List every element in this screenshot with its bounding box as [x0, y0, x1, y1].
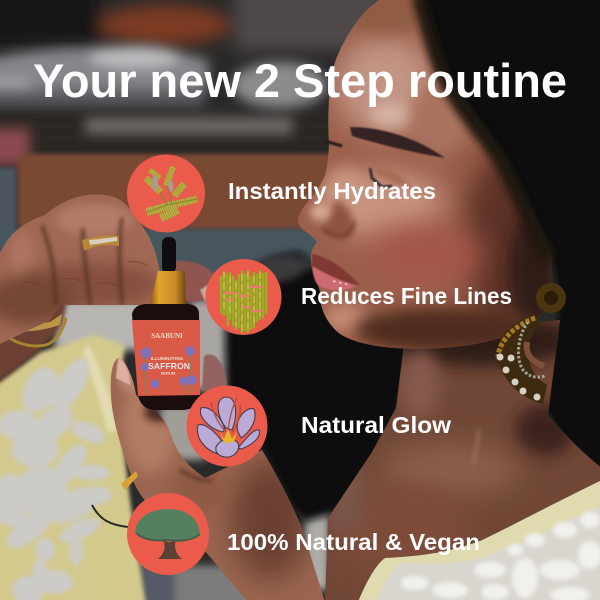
- dark hair behind hand: [225, 252, 415, 522]
- benefit: Reduces Fine Lines: Reduces Fine Lines: [301, 283, 512, 309]
- product bottle: [132, 237, 200, 410]
- product bottle: ILLUMINATING: [151, 356, 184, 361]
- product bottle: SAFFRON: [148, 361, 190, 371]
- badge: saffron flower: [186, 386, 268, 466]
- hair: right side: [412, 0, 600, 480]
- badge: green tree: [127, 493, 209, 575]
- product bottle: SAABUNI: [151, 332, 183, 340]
- badge: wheatgrass bundles: [206, 259, 282, 335]
- white kurta neckline: [358, 480, 600, 600]
- hand holding bottle: [105, 350, 330, 600]
- badge: herb sprig: [127, 154, 205, 232]
- yellow garment with white embroidery: [0, 335, 146, 600]
- hand holding dropper: [0, 190, 213, 350]
- product bottle: SERUM: [161, 370, 176, 376]
- earring: [496, 283, 566, 404]
- neck and chest: [320, 314, 600, 600]
- title: Your new 2 Step routine: [33, 54, 567, 107]
- left forearm with bracelets: [0, 270, 70, 384]
- face: [298, 0, 554, 349]
- benefit: Instantly Hydrates: Instantly Hydrates: [228, 178, 436, 204]
- ring on lower hand: [121, 471, 138, 490]
- benefit: 100% Natural & Vegan: 100% Natural & Vegan: [227, 529, 480, 555]
- benefit: Natural Glow: Natural Glow: [301, 412, 451, 438]
- pale fabric behind bottle: [55, 300, 329, 600]
